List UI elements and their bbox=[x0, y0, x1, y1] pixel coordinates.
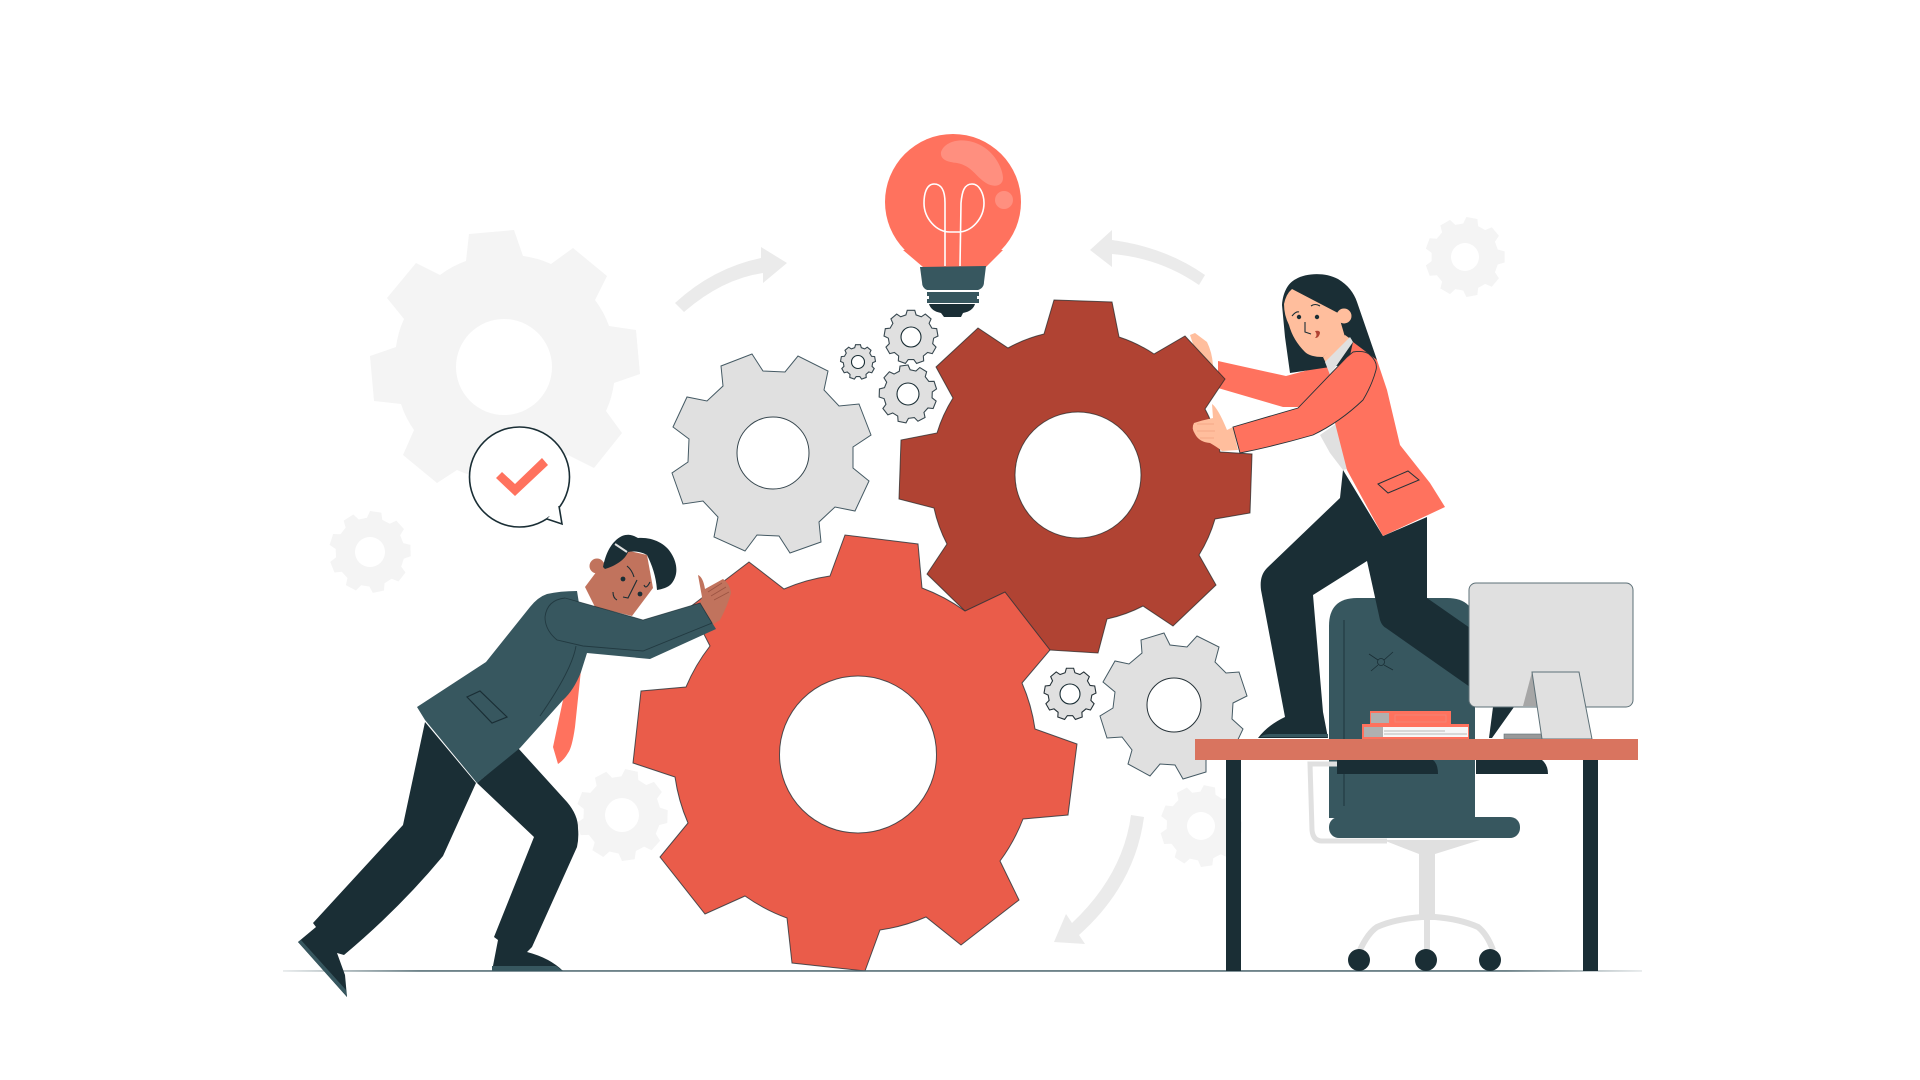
arrow: bottom bbox=[1054, 815, 1144, 944]
desk bbox=[1195, 739, 1638, 971]
man: front leg bbox=[477, 748, 578, 971]
desk: top bbox=[1195, 739, 1638, 760]
background gear: top right pale bbox=[1419, 211, 1511, 302]
ground line bbox=[283, 970, 1642, 972]
woman: back arm and hand behind gear bbox=[1190, 333, 1340, 407]
monitor: stand bbox=[1532, 672, 1592, 739]
woman: far foot bbox=[1489, 707, 1514, 738]
chair: wheels bbox=[1348, 949, 1501, 971]
chair: base bbox=[1360, 917, 1493, 950]
background gear: under desk pale bbox=[1153, 778, 1250, 874]
monitor: stand foot bbox=[1504, 734, 1542, 739]
gear: small grey right bbox=[1044, 668, 1096, 719]
monitor: screen bbox=[1469, 583, 1633, 707]
man: back leg bbox=[298, 722, 476, 997]
monitor: stand shadow bbox=[1523, 672, 1537, 706]
chair: pedestal bbox=[1383, 840, 1480, 854]
man: hair bbox=[603, 535, 676, 590]
book: bottom bbox=[1362, 724, 1469, 739]
man: jacket bbox=[417, 591, 587, 783]
arrow: top left bbox=[675, 247, 787, 312]
woman: near hand bbox=[1193, 404, 1238, 451]
woman: ear bbox=[1336, 308, 1352, 324]
woman: front arm bbox=[1233, 351, 1376, 453]
background gear: large pale bbox=[370, 230, 640, 504]
woman: trousers bbox=[1258, 470, 1470, 738]
gear: medium light grey left bbox=[672, 354, 871, 553]
chair: backrest bbox=[1329, 598, 1475, 818]
woman: pocket bbox=[1378, 471, 1419, 493]
gear: dark red bbox=[899, 300, 1252, 653]
woman: face bbox=[1284, 289, 1345, 357]
arrow: top right bbox=[1090, 230, 1205, 285]
man: ear bbox=[590, 558, 604, 574]
computer monitor bbox=[1469, 583, 1633, 739]
desk: right leg bbox=[1583, 760, 1598, 971]
man: facial features bbox=[613, 566, 650, 600]
speech bubble with check mark bbox=[470, 427, 570, 527]
man: hand bbox=[698, 575, 731, 625]
office chair bbox=[1310, 598, 1520, 971]
man: tie bbox=[553, 670, 581, 764]
woman: neck bbox=[1323, 335, 1352, 372]
man: pocket flap bbox=[467, 691, 507, 723]
man: collar bbox=[576, 588, 592, 607]
woman: shoe sole bbox=[1260, 734, 1328, 737]
man: neck and face bbox=[585, 550, 653, 616]
chair: armrest bbox=[1310, 764, 1387, 841]
gear: small trio near bulb bbox=[841, 310, 941, 426]
desk: left leg bbox=[1226, 760, 1241, 971]
man: shoe soles bbox=[298, 940, 563, 997]
woman pushing gear bbox=[1193, 274, 1514, 738]
stack of books bbox=[1362, 711, 1469, 739]
book: top bbox=[1370, 711, 1451, 724]
woman: back hair bbox=[1282, 274, 1377, 373]
woman: shirt bbox=[1320, 337, 1353, 470]
light bulb bbox=[885, 134, 1021, 317]
woman: facial features bbox=[1292, 304, 1320, 338]
chair: stitching bbox=[1344, 620, 1393, 806]
background gear: centre-left pale bbox=[568, 761, 676, 869]
man pushing gear bbox=[298, 535, 731, 997]
gear: medium light grey right bbox=[1100, 633, 1247, 779]
background gear: left pale bbox=[324, 506, 416, 597]
chair: seat bbox=[1329, 817, 1520, 838]
chair: post bbox=[1419, 854, 1435, 916]
woman: jacket bbox=[1335, 342, 1445, 536]
man: sleeve bbox=[545, 598, 716, 659]
man: hair highlight bbox=[615, 544, 627, 552]
desk: shadow on chair bbox=[1337, 760, 1548, 774]
man: sleeve lines bbox=[540, 598, 712, 716]
gear: coral large bbox=[633, 535, 1077, 971]
